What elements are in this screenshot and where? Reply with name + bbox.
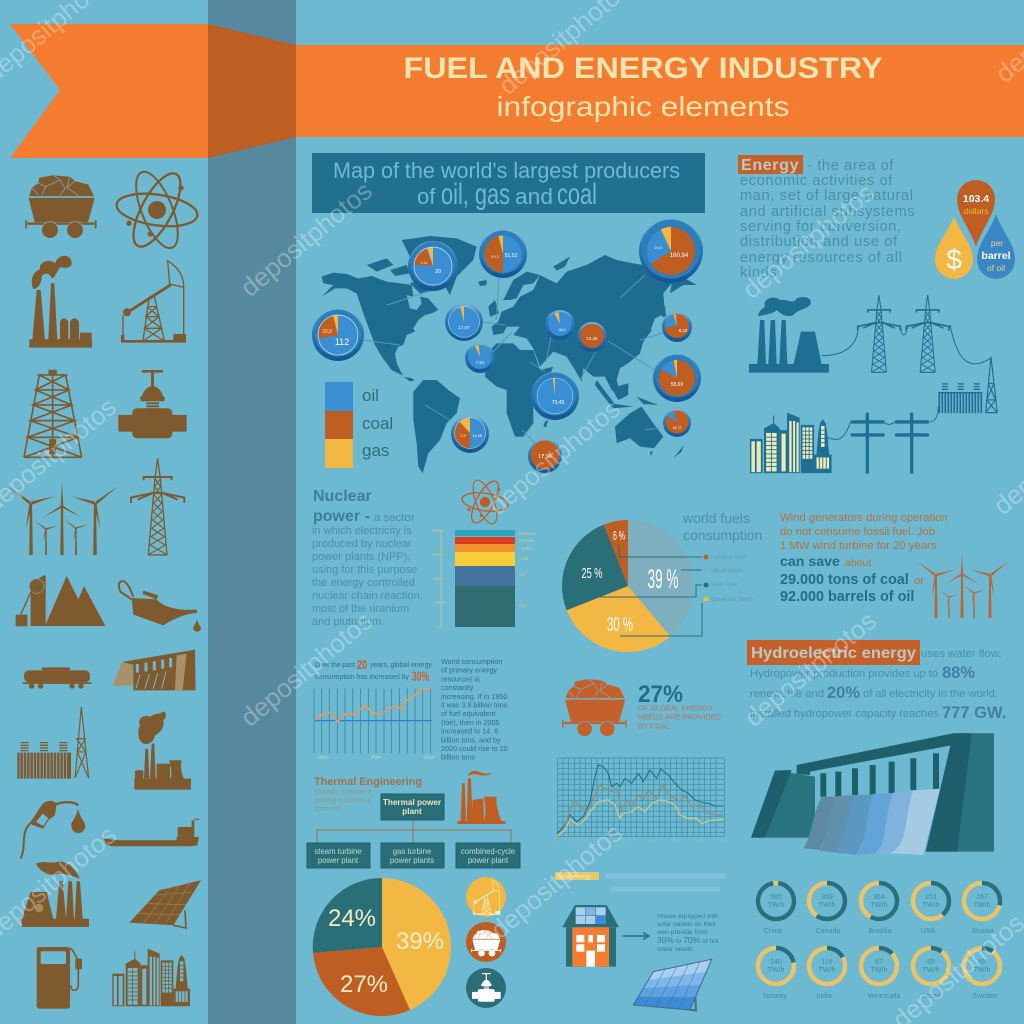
oil price drops: dollars	[963, 206, 989, 216]
text block: wind generators: 1 MW wind turbine for 20 years	[780, 540, 937, 552]
ring: Russia: 167	[976, 894, 988, 901]
nuclear heading and text: produced by nuclear	[312, 538, 412, 550]
icon circle: oil	[466, 877, 506, 917]
ring: Sweden: Sweden	[972, 993, 998, 1000]
icon: coal mine	[16, 575, 105, 626]
stock watermarks: depositphotos	[485, 818, 628, 945]
world consumption text: increased to 14, 8	[441, 727, 498, 736]
chart: coal price lines: 100	[597, 839, 605, 844]
solar text: 30% to 70% of hot	[657, 935, 719, 945]
solar text: water needs	[656, 946, 694, 953]
text block: wind generators: do not consume fossil fuel. Job	[780, 526, 935, 538]
map legend	[325, 382, 393, 468]
bubble: Russia: 19,4	[654, 245, 663, 250]
nuclear heading and text: nuclear chain reaction,	[312, 590, 423, 602]
bubble: Algeria	[465, 343, 495, 373]
oil price drops: 103.4	[963, 193, 989, 205]
growth caption: 20	[357, 657, 367, 672]
bubble: South Africa: 17,96	[538, 454, 552, 460]
text block: hydroelectric energy: 20%	[827, 684, 860, 702]
banner ribbon	[10, 24, 1024, 158]
bubble: Europe North: 51,52	[505, 253, 517, 259]
world consumption text: billion tons, and by	[441, 735, 501, 744]
ring: Russia	[964, 883, 1000, 935]
pie chart: fuels	[562, 520, 694, 652]
pie title: world fuels	[682, 510, 750, 526]
line chart	[314, 688, 435, 759]
text block: energy definition: energy resources of all	[740, 250, 903, 266]
ring: Norway: TW/h	[768, 967, 784, 974]
world consumption text: of fuel equivalent	[441, 709, 495, 718]
box: thermal power plant	[381, 794, 444, 820]
bubble: Europe North	[479, 230, 527, 278]
text block: hydroelectric energy: Hydropower production provides up to	[750, 668, 938, 680]
pie legend: solid fuel	[711, 581, 738, 588]
ring: Japan: TW/h	[923, 967, 939, 974]
icon: fuel nozzle	[21, 801, 85, 859]
panel: world fuels consumption	[562, 510, 762, 652]
growth caption: consumption has increased by	[315, 672, 409, 681]
icon: oil pump jack	[121, 261, 186, 343]
bubble: Iran	[545, 310, 575, 340]
bubble: China: 58,69	[671, 382, 683, 388]
bubble: India	[577, 322, 607, 352]
pie chart: fuels: 25 %	[582, 565, 602, 582]
text block: hydroelectric energy: Hydroelectric energy	[751, 645, 916, 662]
chart: coal price lines: 350	[720, 839, 729, 844]
ring: USA: TW/h	[923, 902, 939, 909]
panel: nuclear power	[312, 477, 537, 629]
pie legend	[704, 554, 754, 603]
stacked bar chart: Hydro	[519, 546, 532, 551]
world consumption text	[441, 657, 508, 762]
icons: lower half of column	[16, 575, 201, 1009]
bubble: Iran: 26,9	[559, 328, 565, 332]
nuclear heading and text: in which electricity is	[312, 525, 412, 537]
world consumption text: (toe), then in 2005	[441, 718, 499, 727]
ring: USA	[913, 883, 949, 935]
icon: wind farm	[8, 482, 118, 555]
box: steam turbine: power plant	[318, 856, 359, 865]
ring: Brazilia: TW/h	[871, 902, 887, 909]
ring: Japan: 69	[927, 959, 935, 966]
bubble: Russia	[639, 219, 703, 283]
pie chart: fuels: 39 %	[648, 564, 678, 594]
stacked bar chart: Biomass	[519, 531, 537, 536]
pie title	[682, 510, 762, 543]
arrow	[623, 932, 649, 940]
oil price drops: per	[991, 238, 1003, 248]
pie legend: nuclear fuel	[711, 554, 747, 561]
map legend: oil	[362, 386, 379, 405]
bubble: South Africa	[528, 439, 562, 473]
bubble: China	[653, 354, 701, 402]
pie title: consumption	[683, 527, 762, 543]
nuclear heading and text	[312, 488, 423, 628]
ring: Russia: TW/h	[974, 902, 990, 909]
solar text: own provide from	[657, 929, 708, 936]
icon: hydro dam	[113, 650, 196, 690]
text block: hydroelectric energy: of all electricity in the world,	[863, 688, 998, 700]
text block: wind generators: 29.000 tons of coal	[780, 572, 909, 588]
growth caption: years, global energy	[370, 660, 432, 669]
box: steam turbine: steam turbine	[314, 847, 362, 856]
world consumption text: constantly	[441, 683, 474, 692]
coal stat: NEEDS ARE PROVIDED	[638, 712, 721, 722]
bubble: Canada: 20	[435, 269, 441, 275]
icon: atom	[115, 167, 199, 253]
ring: China: TW/h	[768, 902, 784, 909]
world map silhouette	[322, 236, 697, 473]
nuclear heading and text: most of the uranium	[312, 603, 409, 615]
world consumption text: resources is	[441, 674, 480, 683]
stacked bar chart: 2000	[435, 600, 446, 605]
thermal heading: Thermal Engineering	[314, 776, 422, 788]
icon: factory with cooling tower	[22, 862, 89, 927]
icon: city skyline	[112, 949, 190, 1006]
solar panel	[633, 959, 712, 1011]
thermal heading: forms of	[314, 804, 342, 813]
bubble: Norway	[445, 303, 483, 341]
growth caption: 30%	[412, 668, 429, 684]
pie chart: fuels for thermal: 27%	[340, 971, 388, 998]
text block: energy definition: kinds.	[740, 265, 782, 281]
icon: power pylon	[131, 458, 184, 555]
chart: coal price lines: 0	[556, 839, 559, 844]
text block: energy definition: man, set of large natural	[740, 188, 914, 204]
stacked bar chart: Coal	[519, 556, 528, 561]
text block: wind generators	[780, 512, 948, 605]
chart: coal price lines: 250	[671, 839, 679, 844]
world consumption text: it was 3.9 billion tons	[441, 700, 508, 710]
vertical band	[208, 0, 296, 1024]
substation	[938, 357, 997, 413]
ring: Venezuela	[861, 948, 900, 1000]
map heading: of	[417, 184, 436, 209]
stock watermarks: depositphotos	[483, 394, 626, 521]
text block: energy definition	[738, 155, 915, 281]
coal stat	[638, 681, 721, 730]
bubble: Canada: 4,16	[421, 261, 427, 265]
pie legend: liquid fuels	[711, 567, 744, 574]
bubble: USA: 33,8	[322, 329, 332, 335]
coal stat: 27%	[638, 681, 683, 708]
coal stat: BY COAL	[638, 722, 670, 730]
nuclear heading and text: and plutonium.	[312, 616, 384, 628]
stock watermarks: depositphotos	[235, 176, 378, 303]
ring: Canada: Canada	[816, 928, 840, 935]
icon: oil can	[119, 581, 201, 632]
box: combined cycle: power plant	[468, 856, 509, 865]
panel: world map	[312, 153, 705, 473]
icon: oil tanker	[103, 819, 199, 846]
bubble: Japan	[662, 312, 692, 342]
title: infographic elements	[496, 91, 790, 122]
ring: Sweden: TW/h	[974, 967, 990, 974]
map legend: gas	[362, 441, 389, 460]
panel: hydropower by country rings	[758, 883, 1000, 1000]
bubble: USA	[312, 309, 364, 361]
icon: fuel pump	[37, 947, 82, 1009]
title	[404, 52, 882, 122]
stock watermarks: depositphotos	[737, 178, 880, 305]
icon: rail tank car	[23, 667, 91, 689]
world consumption text: 2020 could rise to 20	[441, 744, 508, 753]
bubble: India: 12,26	[586, 336, 598, 341]
text block: wind generators: about	[845, 557, 871, 569]
icon circle: coal	[466, 922, 506, 962]
stacked bar chart: Gas	[519, 603, 528, 608]
map legend: coal	[362, 414, 393, 433]
panel: thermal engineering	[307, 771, 520, 1016]
stock watermarks: depositphotos	[739, 606, 882, 733]
text block: energy definition: serving for conversion,	[740, 219, 902, 235]
ring: Norway: Norway	[763, 993, 787, 1000]
panel: energy consumption growth	[314, 657, 508, 762]
text block: energy definition: - the area of	[807, 158, 894, 174]
text block: wind generators: can save	[780, 554, 840, 570]
box: gas turbine: gas turbine	[393, 847, 431, 856]
ring: Brazilia: Brazilia	[869, 928, 892, 935]
bubble: Australia	[663, 409, 691, 437]
left icon column	[8, 167, 201, 1009]
text block: hydroelectric energy	[747, 640, 1006, 722]
chart: coal price lines: 150	[622, 839, 630, 844]
bubble: Brazil: 11,46	[472, 433, 483, 438]
stacked bar chart: 8000	[433, 528, 444, 533]
bubble: Brazil: 3,9	[460, 433, 467, 438]
connector lines	[362, 275, 663, 443]
growth caption	[315, 657, 432, 684]
ring: USA: 251	[925, 894, 937, 901]
stacked bar chart: 0	[439, 624, 442, 629]
stacked bar chart: 4000	[433, 576, 444, 581]
stock watermarks: depositphotos	[235, 606, 378, 733]
box: combined cycle: combined-cycle	[461, 847, 515, 856]
icon: factory chimneys	[29, 256, 92, 348]
ring: Venezuela: 87	[875, 959, 883, 966]
icon: wind turbines	[917, 552, 1009, 618]
bubble: Middle East: 73,45	[552, 400, 564, 406]
power cables	[822, 325, 991, 439]
bubble: Europe North: 49,3	[491, 254, 500, 259]
coal stat: OF GLOBAL ENERGY	[638, 704, 713, 712]
oil price drops	[935, 180, 1015, 279]
bubble: Japan: 8,42	[679, 328, 688, 333]
nuclear heading and text: a sector	[374, 512, 415, 524]
solar label: Solar energy	[557, 874, 591, 880]
energy supply chain illustration	[749, 295, 997, 474]
solar house	[562, 905, 619, 967]
ring: India: India	[816, 993, 832, 1000]
city	[750, 413, 832, 473]
thermal heading: among traditional	[314, 796, 371, 804]
ring: Norway	[758, 948, 794, 1000]
ring: India	[809, 948, 845, 1000]
stacked bar chart: Oil	[519, 572, 524, 577]
line chart: 1994	[317, 754, 328, 759]
icon: coal cart	[25, 175, 97, 238]
pie chart: fuels for thermal	[313, 878, 451, 1016]
icon: pipeline valve	[118, 370, 187, 438]
map heading: Map of the world's largest producers	[333, 158, 680, 183]
box: gas turbine	[381, 843, 444, 868]
transmission pylons	[858, 295, 949, 372]
bubble: USA: 112	[335, 337, 349, 347]
world consumption text: increasing. If in 1950	[441, 692, 507, 701]
oil price drops: of oil	[987, 263, 1005, 273]
icon: orange coal cart	[562, 679, 627, 736]
illustration: hydroelectric dam	[751, 733, 994, 855]
ring: Japan	[913, 948, 949, 1000]
ring: China: 585	[770, 894, 782, 901]
line chart: 2004	[371, 754, 381, 759]
ring: USA: USA	[921, 928, 936, 935]
map heading: coal	[557, 178, 597, 211]
map heading: and	[515, 184, 553, 209]
ring: Canada	[809, 883, 845, 935]
text block: hydroelectric energy: 777 GW.	[942, 704, 1006, 722]
icon: substation and mast	[17, 707, 89, 779]
chart: coal price lines: 200	[647, 839, 655, 844]
chart: coal price lines: 300	[696, 839, 704, 844]
ring: Brazilia	[861, 883, 897, 935]
icon: solar panel	[129, 880, 201, 928]
ring: China	[758, 883, 794, 935]
box: thermal power plant: Thermal power	[383, 798, 442, 807]
bubble: Canada	[408, 241, 458, 291]
panel: coal 27 percent	[562, 679, 721, 736]
line chart: 2014	[424, 754, 435, 759]
text block: energy definition: Energy	[741, 157, 799, 174]
thermal heading	[314, 776, 422, 813]
ring: Venezuela: TW/h	[871, 967, 887, 974]
solar text	[656, 913, 719, 953]
ring: Japan: Japan	[921, 993, 941, 1000]
solar text: House equipped with	[657, 913, 719, 920]
text block: hydroelectric energy: installed hydropower capacity reaches	[750, 708, 939, 720]
text block: wind generators: Wind generators during operation	[780, 512, 948, 524]
bubble: Algeria: 7,51	[476, 360, 485, 365]
thermal heading: globally prevalent	[314, 787, 372, 796]
bubble: Norway: 17,07	[458, 325, 470, 330]
icon: atom orange	[461, 477, 509, 527]
ring: India: 116	[821, 959, 833, 966]
chart: coal price lines: 50	[573, 839, 579, 844]
flow chart connectors	[317, 820, 511, 843]
ring: Sweden: 65	[978, 959, 986, 966]
text block: energy definition: economic activities of	[740, 173, 893, 189]
text block: hydroelectric energy: renewable and	[750, 688, 824, 700]
world consumption text: World consumption	[441, 657, 502, 666]
oil price drops: barrel	[981, 250, 1011, 262]
pie chart: fuels for thermal: 24%	[328, 905, 376, 932]
icon: power plant with smoke	[134, 712, 191, 790]
pie leaders	[600, 545, 702, 636]
world consumption text: of primary energy	[441, 666, 497, 675]
chart: coal price lines	[556, 758, 729, 844]
title: FUEL AND ENERGY INDUSTRY	[404, 52, 882, 85]
text block: wind generators: or	[914, 575, 924, 587]
icon circle: gas	[466, 968, 506, 1008]
oil price drops: $	[946, 244, 962, 275]
pie chart: fuels: 6 %	[613, 528, 625, 543]
ring: Brazilia: 364	[873, 894, 885, 901]
thermal plant icon	[458, 771, 505, 824]
box: steam turbine	[307, 843, 370, 868]
map heading: oil, gas	[441, 178, 510, 211]
ring: China: China	[764, 928, 782, 935]
stacked bar chart: 6000	[433, 552, 444, 557]
bubble: Russia: 160,84	[670, 253, 689, 259]
utility poles	[851, 413, 929, 474]
nuclear heading and text: power -	[313, 508, 370, 525]
text block: energy definition: distribution and use of	[740, 234, 898, 250]
bubble: Middle East	[531, 372, 579, 420]
icon: oil derrick	[24, 371, 82, 457]
pie chart: fuels for thermal: 39%	[396, 928, 444, 955]
ring: Canada: TW/h	[819, 902, 835, 909]
power station	[749, 297, 829, 373]
box: thermal power plant: plant	[402, 807, 422, 816]
text block: energy definition: and artificial subsystems	[740, 204, 915, 220]
box: combined cycle	[456, 843, 520, 868]
ring: Norway: 140	[770, 959, 782, 966]
pie chart: fuels: 30 %	[607, 614, 633, 636]
ring: Sweden	[964, 948, 1000, 1000]
nuclear heading and text: using for this purpose	[312, 564, 417, 576]
icons: upper half of column	[24, 167, 199, 555]
text block: hydroelectric energy: uses water flow.	[921, 648, 1001, 660]
solar label	[555, 872, 726, 889]
ring: India: TW/h	[819, 967, 835, 974]
bubble: Australia: 16,72	[673, 426, 681, 430]
world consumption text: billion tons	[441, 753, 475, 762]
panel: solar energy	[555, 872, 726, 1011]
growth caption: Over the past	[315, 660, 356, 669]
nuclear heading and text: power plants (NPP),	[312, 551, 410, 563]
nuclear heading and text: Nuclear	[313, 488, 372, 505]
nuclear heading and text: the energy controlled	[312, 577, 415, 589]
solar text: solar panels on their	[657, 921, 717, 928]
stacked bar chart: Nuclear	[519, 538, 535, 543]
stacked bar chart	[433, 528, 537, 629]
text block: wind generators: 92.000 barrels of oil	[780, 589, 914, 605]
pie legend: gaseous fuels	[711, 596, 754, 603]
map heading	[312, 153, 705, 213]
ring: Russia: Russia	[972, 928, 994, 935]
ring: Canada: 369	[821, 894, 833, 901]
text block: hydroelectric energy: 88%	[942, 664, 975, 682]
box: gas turbine: power plants	[390, 856, 434, 865]
ring: Venezuela: Venezuela	[868, 993, 900, 1000]
bubble: Brazil	[451, 415, 489, 453]
